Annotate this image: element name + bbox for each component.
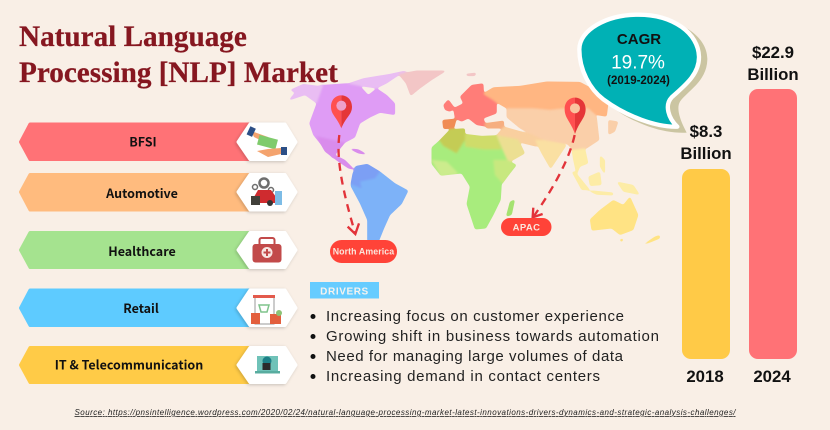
map: North America — [309, 83, 395, 158]
world map — [288, 70, 660, 247]
bar chart — [680, 43, 799, 386]
bar: 2018 — [682, 169, 730, 359]
panel: Retail band — [20, 290, 296, 326]
icon: first aid kit — [238, 232, 296, 268]
callout: CAGR — [579, 15, 707, 133]
panel: Retail band: Retail — [123, 298, 159, 317]
title: Processing [NLP] Market — [19, 57, 338, 89]
map: Central Asia and China — [507, 107, 599, 151]
map: Greenland and Iceland — [398, 71, 477, 96]
source: Source: https://pnsintelligence.wordpress.com/2020/02/24/natural-language-processing-market-latest-innovations-drivers-dynamics-and-strategic-analysis-challenges/ — [74, 408, 736, 417]
value: 2018 — [680, 122, 732, 163]
value: 2018: Billion — [680, 144, 732, 163]
map: Southeast Asia — [572, 148, 640, 195]
heading: drivers — [310, 282, 379, 298]
icon: laptop — [238, 348, 296, 382]
text block: drivers list — [310, 308, 660, 385]
icon: North America pin — [331, 95, 352, 128]
panel: Healthcare band: Healthcare — [108, 241, 176, 260]
map: land masses — [288, 70, 660, 247]
value: 2024: Billion — [747, 65, 799, 84]
panel: BFSI band: BFSI — [129, 132, 157, 150]
value: 2024 — [747, 43, 799, 84]
map: Alaska and Arctic Canada — [288, 70, 408, 103]
label: APAC — [501, 218, 552, 236]
icon: shop and wallet — [238, 290, 296, 326]
panel: IT & Telecommunication band: IT & Telecommunication — [55, 354, 203, 374]
map: Japan and Korea — [608, 120, 618, 135]
callout: CAGR: CAGR — [617, 31, 661, 48]
axis label: 2024: 2024 — [753, 367, 791, 386]
icon: car and gears — [238, 174, 296, 210]
icon: money hands — [238, 124, 296, 160]
panel: Automotive band — [20, 174, 296, 210]
panel: Healthcare band — [20, 232, 296, 268]
text block: drivers list: Increasing focus on customer experience — [326, 308, 625, 325]
text block: drivers list: Increasing demand in contact centers — [326, 368, 601, 385]
arrow: APAC dashed — [533, 135, 575, 217]
title — [19, 21, 338, 89]
panel: IT & Telecommunication band — [20, 348, 296, 382]
map: Australia and New Zealand — [590, 197, 660, 247]
icon: APAC pin — [565, 98, 586, 134]
map: Europe — [442, 83, 504, 129]
map: Russia — [483, 82, 608, 117]
text block: drivers list: Need for managing large volumes of data — [326, 348, 624, 365]
panel: BFSI band — [20, 124, 296, 160]
text block: drivers list: Growing shift in business towards automation — [326, 328, 660, 345]
map: South America — [351, 164, 408, 242]
callout: CAGR: 19.7% — [611, 52, 665, 74]
label: North America: North America — [333, 246, 394, 256]
heading: drivers: DRIVERS — [320, 286, 369, 298]
arrow: North America dashed — [339, 135, 359, 234]
panel: Automotive band: Automotive — [105, 183, 178, 202]
value: 2018: $8.3 — [690, 122, 722, 141]
map: Central America and Caribbean — [316, 136, 368, 170]
map: India — [535, 140, 567, 169]
title: Natural Language — [19, 21, 247, 53]
callout: CAGR: (2019-2024) — [607, 75, 670, 87]
label: APAC: APAC — [513, 222, 540, 234]
value: 2024: $22.9 — [752, 43, 794, 62]
bar: 2024 — [749, 89, 797, 359]
label: North America — [330, 240, 397, 263]
axis label: 2018: 2018 — [686, 367, 724, 386]
map: Africa — [432, 128, 517, 229]
map: Middle East — [496, 127, 543, 163]
